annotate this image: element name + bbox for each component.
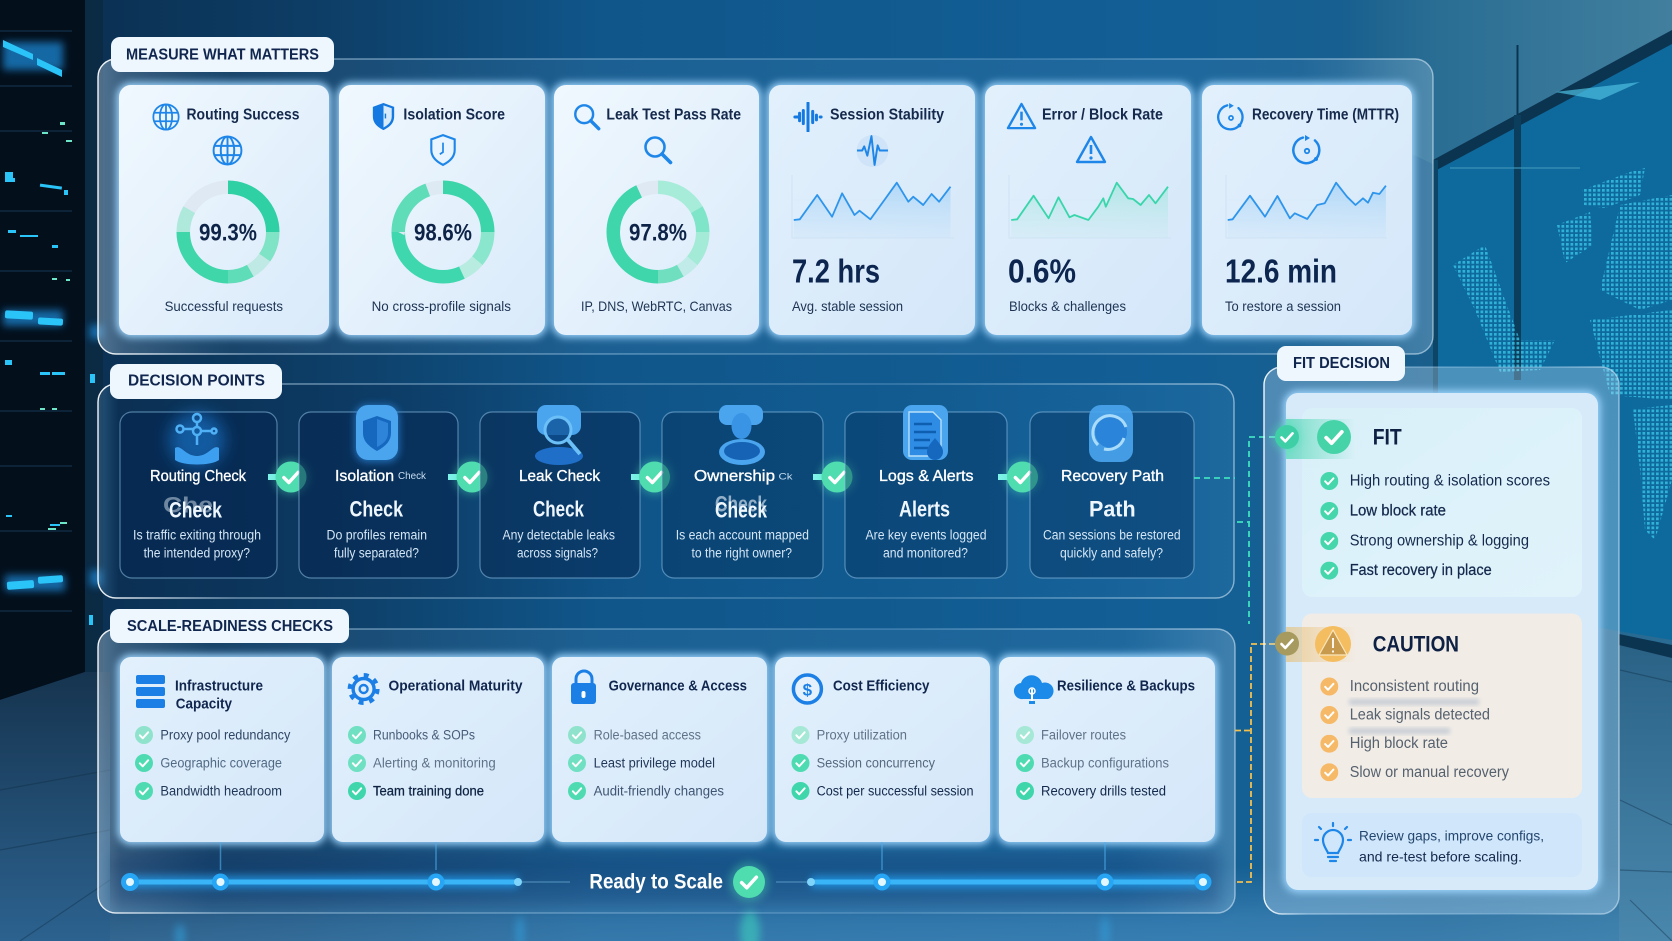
card: operational maturity: Team training done <box>373 784 484 798</box>
card: leak check: across signals? <box>517 546 598 560</box>
card: session stability: 7.2 hrs <box>792 252 880 290</box>
card: leak test pass rate: 97.8% <box>629 220 687 246</box>
callout: re-test tip: and re-test before scaling. <box>1359 848 1522 864</box>
progress line: right <box>776 842 1212 890</box>
icon: account owner <box>719 405 765 465</box>
callout: re-test tip: Review gaps, improve configs, <box>1359 828 1544 844</box>
icon: dollar coin: $ <box>803 680 813 700</box>
icon: fit check <box>1317 420 1351 454</box>
card: infrastructure capacity: Proxy pool redundancy <box>160 728 291 742</box>
card: error block rate: 0.6% <box>1008 252 1076 290</box>
card: operational maturity: Runbooks & SOPs <box>373 728 475 742</box>
card: resilience and backups: Resilience & Backups <box>1057 678 1195 694</box>
icon: light bulb <box>1315 823 1351 861</box>
card: cost efficiency <box>775 657 990 842</box>
line chart: recovery time <box>1226 175 1387 238</box>
card: routing check: Che <box>163 492 213 518</box>
card: operational maturity: Alerting & monitoring <box>373 756 496 770</box>
icon: padlock <box>571 671 596 704</box>
card: resilience and backups: Backup configurations <box>1041 756 1169 770</box>
card: resilience and backups <box>999 657 1215 842</box>
card: operational maturity: Operational Maturity <box>388 678 523 694</box>
card: isolation score <box>339 85 545 335</box>
box: caution: Leak signals detected <box>1350 706 1490 724</box>
card: infrastructure capacity: Infrastructure <box>175 678 263 694</box>
connector check: ownership to logs <box>813 459 855 495</box>
card: isolation check: Check <box>398 471 427 482</box>
card: routing check: the intended proxy? <box>144 546 250 560</box>
card: logs and alerts: Alerts <box>899 496 950 522</box>
box: fit: Low block rate <box>1350 502 1446 520</box>
card: leak test pass rate: IP, DNS, WebRTC, Canvas <box>581 298 732 314</box>
card: isolation score: Isolation Score <box>403 106 505 124</box>
card: infrastructure capacity <box>120 657 324 842</box>
card: routing success <box>119 85 329 335</box>
card: recovery path: Path <box>1089 496 1136 522</box>
card: ownership check: to the right owner? <box>692 546 792 560</box>
heading: scale-readiness checks: SCALE-READINESS CHECKS <box>127 618 333 635</box>
card: leak test pass rate <box>554 85 759 335</box>
connector check: isolation to leak <box>448 459 490 495</box>
heading: fit decision <box>1277 346 1405 381</box>
card: isolation check: Do profiles remain <box>326 528 427 542</box>
card: isolation check: Check <box>350 496 404 522</box>
ready to scale label <box>589 862 769 902</box>
connector: fit dashed line <box>1194 437 1275 624</box>
card: ownership check <box>662 405 823 578</box>
card: isolation check: Isolation <box>335 468 394 485</box>
line chart: session stability <box>792 175 954 238</box>
card: governance and access: Governance & Access <box>609 678 747 694</box>
heading: scale-readiness checks <box>110 609 349 643</box>
progress line: left <box>121 842 570 891</box>
card: recovery path <box>1030 405 1194 578</box>
card: resilience and backups: Recovery drills tested <box>1041 784 1166 798</box>
card: error block rate: Blocks & challenges <box>1009 298 1126 314</box>
card: ownership check: Ownership <box>694 468 775 485</box>
card: ownership check: Ck <box>778 472 793 482</box>
card: infrastructure capacity: Bandwidth headroom <box>160 784 282 798</box>
icon: isolation shield <box>355 405 399 462</box>
icon: routing network <box>169 412 225 468</box>
card: cost efficiency: Cost Efficiency <box>833 678 930 694</box>
icon: server stack <box>136 675 165 708</box>
card: recovery time: 12.6 min <box>1225 252 1337 290</box>
card: recovery path: Can sessions be restored <box>1043 528 1181 542</box>
card: routing check: Check <box>169 498 223 522</box>
icon: gear <box>350 675 378 703</box>
card: cost efficiency: Session concurrency <box>817 756 935 770</box>
card: leak check: Check <box>533 496 585 522</box>
callout: re-test tip <box>1302 813 1582 877</box>
icon: dollar coin <box>793 675 821 703</box>
icon: caution triangle <box>1315 626 1351 662</box>
heading: fit decision: FIT DECISION <box>1293 355 1390 372</box>
box: fit <box>1286 408 1582 597</box>
card: isolation score: No cross-profile signals <box>372 298 511 314</box>
panel: scale-readiness checks <box>98 609 1235 913</box>
card: logs and alerts <box>845 405 1007 578</box>
card: isolation check <box>299 405 458 578</box>
card: cost efficiency: Proxy utilization <box>817 728 907 742</box>
ready to scale label: Ready to Scale <box>589 870 723 894</box>
box: fit: Strong ownership & logging <box>1350 532 1529 550</box>
card: infrastructure capacity: Geographic coverage <box>160 756 282 770</box>
line chart: error block rate <box>1009 175 1171 238</box>
panel: fit decision <box>1264 346 1619 914</box>
connector check: routing to isolation <box>268 459 309 495</box>
heading: decision points <box>110 364 282 399</box>
card: governance and access: Role-based access <box>594 728 701 742</box>
connector check: logs to recovery <box>998 459 1040 495</box>
connector node: fit <box>1272 422 1302 452</box>
card: routing success: Successful requests <box>165 298 283 314</box>
card: error block rate <box>985 85 1191 335</box>
card: infrastructure capacity: Capacity <box>176 696 233 712</box>
heading: measure what matters <box>111 37 334 72</box>
connector node: caution <box>1275 632 1299 656</box>
card: operational maturity <box>332 657 544 842</box>
box: caution: CAUTION <box>1373 632 1459 656</box>
heading: measure what matters: MEASURE WHAT MATTERS <box>126 46 319 64</box>
connector: caution dashed line <box>1235 644 1275 882</box>
card: session stability <box>769 85 975 335</box>
card: governance and access: Audit-friendly changes <box>594 784 724 798</box>
card: leak check <box>480 405 640 578</box>
card: routing check: Routing Check <box>150 468 247 485</box>
card: ownership check: Check <box>715 498 768 522</box>
card: leak test pass rate: Leak Test Pass Rate <box>606 106 741 124</box>
card: logs and alerts: Logs & Alerts <box>879 468 974 485</box>
card: isolation score: 98.6% <box>414 220 472 246</box>
card: routing check: Is traffic exiting through <box>133 528 261 542</box>
card: recovery path: quickly and safely? <box>1060 546 1163 560</box>
card: logs and alerts: Are key events logged <box>866 528 986 542</box>
box: caution <box>1286 614 1582 798</box>
card: recovery path: Recovery Path <box>1061 468 1164 485</box>
card: routing check <box>120 412 277 578</box>
card: cost efficiency: Cost per successful session <box>817 784 974 798</box>
card: governance and access: Least privilege model <box>594 756 715 770</box>
card: routing success: 99.3% <box>199 220 257 246</box>
icon: leak magnifier <box>535 405 583 465</box>
card: isolation check: fully separated? <box>334 546 419 560</box>
box: fit: Fast recovery in place <box>1350 562 1492 579</box>
card: recovery time <box>1202 85 1412 335</box>
card: error block rate: Error / Block Rate <box>1042 106 1163 124</box>
box: fit: High routing & isolation scores <box>1350 472 1550 490</box>
box: caution: High block rate <box>1350 735 1448 752</box>
card: leak check: Leak Check <box>519 468 601 485</box>
card: routing success: Routing Success <box>186 106 300 124</box>
box: caution: Inconsistent routing <box>1350 678 1479 695</box>
panel: decision points <box>98 364 1234 598</box>
card: logs and alerts: and monitored? <box>883 546 968 560</box>
box: fit: FIT <box>1373 424 1402 450</box>
panel: measure what matters <box>98 37 1433 354</box>
card: governance and access <box>552 657 767 842</box>
card: ownership check: Is each account mapped <box>676 528 809 542</box>
card: leak check: Any detectable leaks <box>502 528 615 542</box>
card: resilience and backups: Failover routes <box>1041 728 1126 742</box>
card: recovery time: Recovery Time (MTTR) <box>1252 106 1399 124</box>
card: recovery time: To restore a session <box>1225 298 1341 314</box>
icon: recovery cycle <box>1089 405 1133 462</box>
icon: log document <box>903 405 948 460</box>
card: ownership check: Check <box>715 492 768 516</box>
card: session stability: Avg. stable session <box>792 298 903 314</box>
card: session stability: Session Stability <box>830 106 944 124</box>
connector check: leak to ownership <box>631 459 672 495</box>
icon: cloud <box>1014 675 1054 704</box>
heading: decision points: DECISION POINTS <box>128 372 265 390</box>
box: caution: Slow or manual recovery <box>1350 764 1509 781</box>
